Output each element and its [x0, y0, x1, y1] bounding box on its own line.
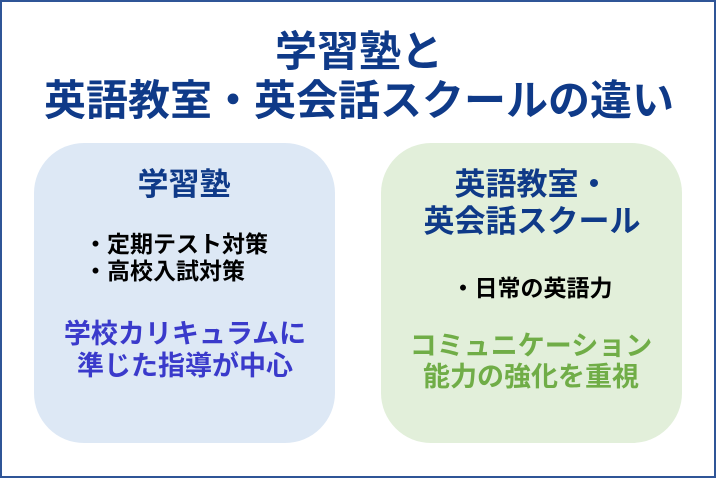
callout: コミュニケーション能力: [410, 331, 652, 392]
panel heading: 英語教室・英会話スクール: 英語教室・: [454, 167, 610, 202]
list: 英語教室の内容: ・日常の英語力: [452, 275, 612, 301]
list: 学習塾の内容: ・高校入試対策: [84, 258, 245, 284]
panel heading: 英語教室・英会話スクール: [424, 167, 640, 239]
title: [44, 28, 674, 124]
title: 英語教室・英会話スクールの違い: [44, 77, 674, 124]
list: 学習塾の内容: ・定期テスト対策: [84, 231, 268, 257]
callout: 学校カリキュラム: [64, 319, 306, 381]
panel heading: 学習塾: 学習塾: [138, 167, 230, 202]
callout: コミュニケーション能力: 能力の強化を重視: [423, 362, 639, 392]
callout: 学校カリキュラム: 学校カリキュラムに: [64, 319, 306, 349]
panel heading: 英語教室・英会話スクール: 英会話スクール: [424, 204, 640, 239]
callout: 学校カリキュラム: 準じた指導が中心: [77, 351, 293, 381]
panel: 学習塾: [34, 143, 335, 443]
callout: コミュニケーション能力: コミュニケーション: [410, 331, 652, 361]
panel: 英語教室・英会話スクール: [381, 143, 682, 443]
title: 学習塾と: [275, 28, 443, 75]
list: 学習塾の内容: [84, 231, 268, 284]
